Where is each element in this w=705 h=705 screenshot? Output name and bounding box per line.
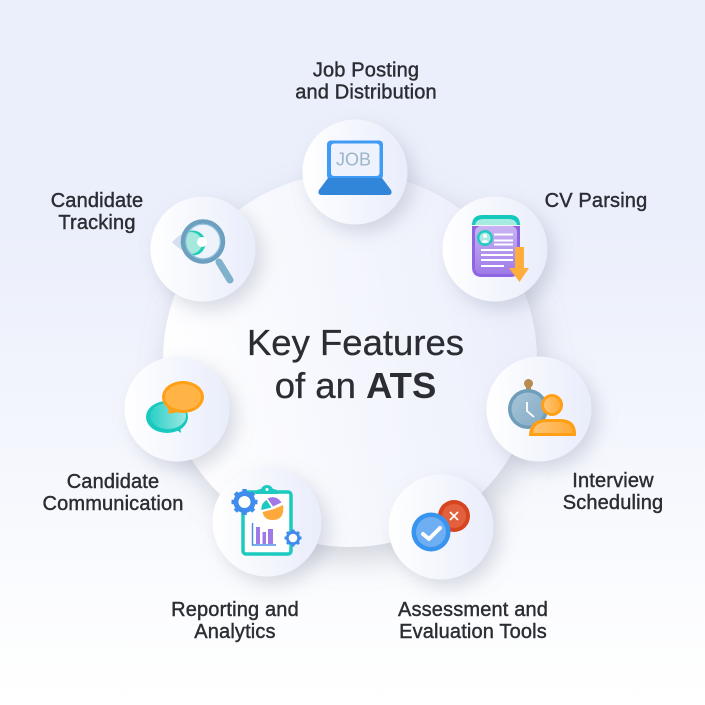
label: candidate tracking: Candidate xyxy=(51,190,143,212)
node: job posting xyxy=(302,120,408,224)
node: candidate communication xyxy=(124,356,230,462)
icon: cv document xyxy=(472,215,529,282)
icon: laptop: JOB xyxy=(336,150,371,170)
icon: speech bubbles xyxy=(146,381,204,433)
label: candidate tracking xyxy=(51,190,143,234)
label: candidate communication xyxy=(42,471,184,515)
icon: download arrow xyxy=(509,247,529,282)
node: cv parsing xyxy=(442,196,548,302)
label: cv parsing: CV Parsing xyxy=(545,190,647,212)
label: job posting: and Distribution xyxy=(295,82,437,104)
icon: small gear xyxy=(284,530,302,546)
label: reporting xyxy=(171,599,299,643)
label: assessment: Assessment and xyxy=(398,599,548,621)
label: job posting: Job Posting xyxy=(313,60,419,82)
node: interview scheduling xyxy=(486,356,592,462)
icon: eye and magnifier xyxy=(172,222,230,280)
icon: check and cross badges xyxy=(412,500,470,552)
icon: large gear xyxy=(232,489,258,515)
node: assessment xyxy=(388,474,494,580)
label: candidate communication: Communication xyxy=(42,493,184,515)
label: assessment xyxy=(398,599,548,643)
central circle xyxy=(163,173,537,547)
title: of an ATS xyxy=(275,365,436,406)
label: reporting: Reporting and xyxy=(171,599,299,621)
label: candidate tracking: Tracking xyxy=(58,212,136,234)
label: interview scheduling: Scheduling xyxy=(563,492,663,514)
node: candidate tracking xyxy=(150,196,256,302)
label: reporting: Analytics xyxy=(194,621,276,643)
pie chart xyxy=(261,497,283,520)
icon: stopwatch and person xyxy=(508,379,576,436)
label: candidate communication: Candidate xyxy=(67,471,159,493)
label: interview scheduling xyxy=(563,470,663,514)
node: reporting xyxy=(212,468,322,576)
label: job posting xyxy=(295,60,437,104)
title: Key Features xyxy=(247,322,464,363)
icon: clipboard report xyxy=(232,485,302,554)
title xyxy=(247,322,464,406)
label: assessment: Evaluation Tools xyxy=(399,621,547,643)
label: interview scheduling: Interview xyxy=(572,470,654,492)
